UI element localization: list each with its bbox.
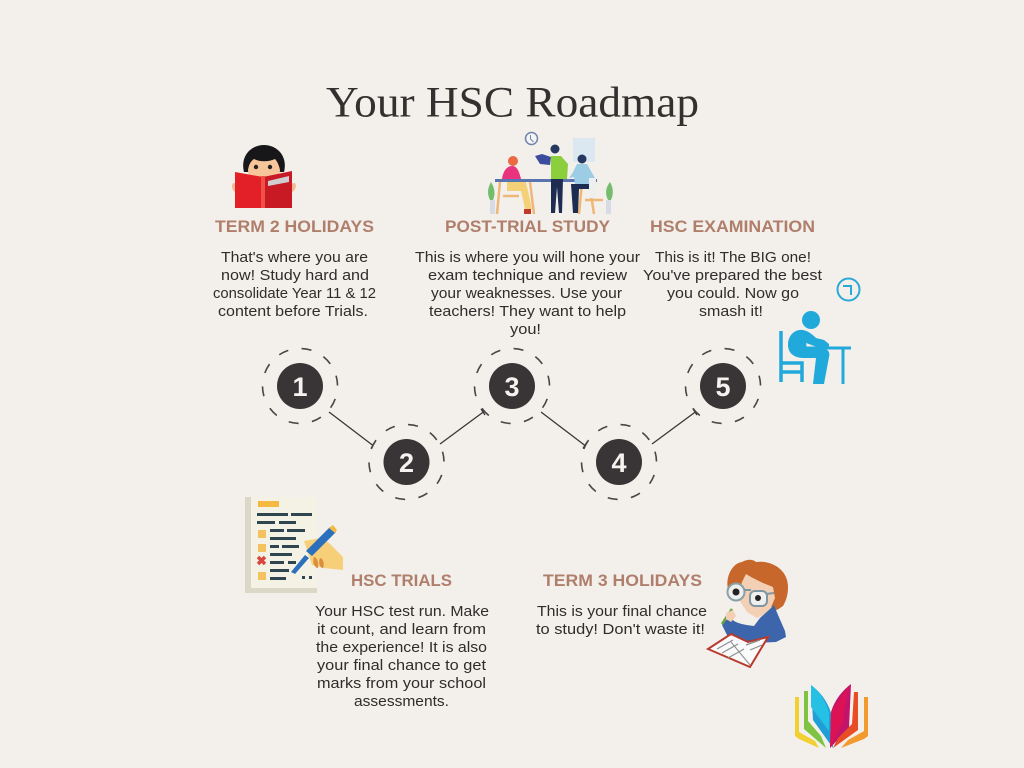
text: term 3 holidays body bbox=[536, 603, 707, 638]
text: term 2 holidays body: consolidate Year 11 & 12 bbox=[213, 285, 376, 302]
text: hsc examination body: This is it! The BIG one! bbox=[655, 249, 811, 266]
step 5 bbox=[677, 340, 769, 432]
icon: worried student with glasses and open book bbox=[708, 560, 788, 667]
text: term 3 holidays body: This is your final chance bbox=[537, 603, 707, 620]
text: hsc examination body bbox=[643, 249, 823, 320]
step 2 bbox=[360, 416, 453, 508]
icon: rainbow book logo bbox=[795, 684, 868, 748]
text: post-trial study body bbox=[415, 249, 640, 338]
text: hsc examination body: you could. Now go bbox=[667, 285, 799, 302]
text: hsc trials body: the experience! It is also bbox=[316, 639, 487, 656]
title: Your HSC Roadmap bbox=[326, 80, 699, 126]
step 1: 1 bbox=[292, 372, 308, 402]
icon: checklist with writing hand bbox=[245, 497, 343, 593]
heading: post-trial study: POST-TRIAL STUDY bbox=[445, 217, 611, 236]
heading: hsc examination: HSC EXAMINATION bbox=[650, 217, 815, 236]
text: post-trial study body: your weaknesses. Use your bbox=[431, 285, 622, 302]
text: term 2 holidays body bbox=[213, 249, 376, 320]
text: hsc trials body: Your HSC test run. Make bbox=[315, 603, 489, 620]
text: term 2 holidays body: now! Study hard and bbox=[221, 267, 369, 284]
text: hsc trials body: assessments. bbox=[354, 693, 449, 710]
text: hsc examination body: You've prepared the best bbox=[643, 267, 823, 284]
heading: hsc trials: HSC TRIALS bbox=[351, 571, 452, 590]
text: term 3 holidays body: to study! Don't waste it! bbox=[536, 621, 705, 638]
step 2: 2 bbox=[399, 448, 414, 478]
text: post-trial study body: teachers! They want to help bbox=[429, 303, 626, 320]
icon: clock bbox=[526, 132, 538, 144]
text: post-trial study body: exam technique and review bbox=[428, 267, 627, 284]
heading: term 2 holidays: TERM 2 HOLIDAYS bbox=[215, 217, 374, 236]
text: term 2 holidays body: content before Trials. bbox=[218, 303, 368, 320]
text: term 2 holidays body: That's where you are bbox=[221, 249, 368, 266]
text: post-trial study body: you! bbox=[510, 321, 541, 338]
icon: child reading red book bbox=[232, 145, 296, 208]
text: hsc trials body: marks from your school bbox=[317, 675, 486, 692]
text: post-trial study body: This is where you will hone your bbox=[415, 249, 640, 266]
step 3: 3 bbox=[504, 372, 520, 402]
icon: students studying at a table bbox=[488, 132, 613, 214]
step 3 bbox=[466, 340, 558, 432]
step 1 bbox=[254, 340, 346, 432]
step 4: 4 bbox=[611, 448, 627, 478]
icon: person writing at a desk with clock bbox=[781, 278, 860, 384]
text: hsc examination body: smash it! bbox=[699, 303, 763, 320]
text: hsc trials body: your final chance to get bbox=[317, 657, 487, 674]
step 5: 5 bbox=[715, 372, 731, 402]
text: hsc trials body bbox=[315, 603, 489, 710]
text: hsc trials body: it count, and learn from bbox=[317, 621, 486, 638]
connectors between steps bbox=[329, 409, 697, 448]
heading: term 3 holidays: TERM 3 HOLIDAYS bbox=[543, 571, 702, 590]
step 4 bbox=[573, 416, 665, 508]
